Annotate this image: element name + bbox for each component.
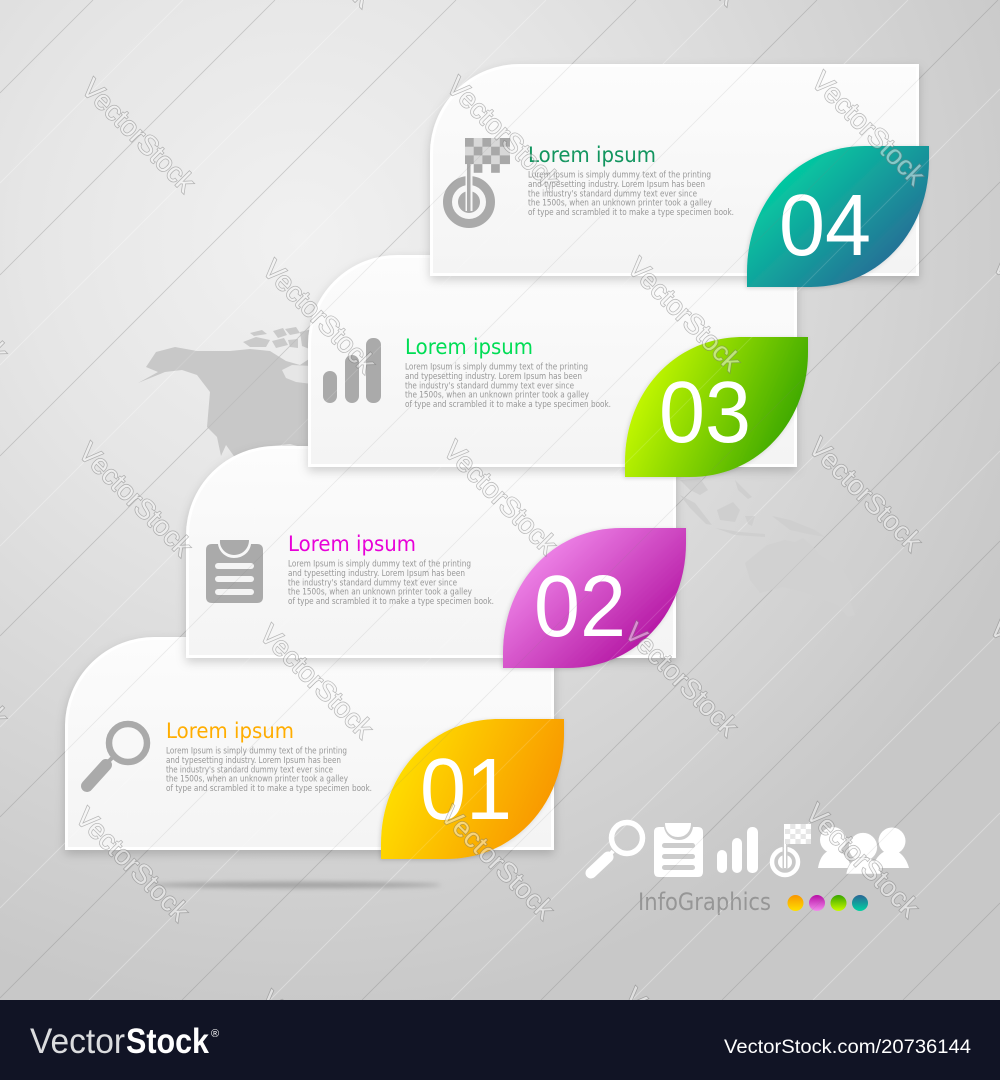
watermarks: VectorStock <box>435 799 561 925</box>
footer logo: ® <box>211 1028 219 1040</box>
text block 01: the industry's standard dummy text ever since <box>166 766 333 776</box>
watermarks: VectorStock <box>257 253 383 379</box>
text block 03: of type and scrambled it to make a type specimen book. <box>405 400 611 410</box>
text block 02: the 1500s, when an unknown printer took a galley <box>288 588 472 598</box>
text block 01: the 1500s, when an unknown printer took a galley <box>166 774 348 784</box>
footer bar <box>0 1000 1000 1080</box>
icon: checkered flag and target <box>448 138 510 224</box>
InfoGraphics label: InfoGraphics <box>638 888 771 916</box>
map: Hudson Bay <box>282 365 312 384</box>
icon: white magnifier <box>591 822 642 873</box>
panel: step 03 <box>310 256 808 477</box>
text block 04: and typesetting industry. Lorem Ipsum has been <box>528 180 705 190</box>
card 02 <box>188 448 674 656</box>
heading 03: Lorem ipsum <box>405 335 533 360</box>
leaf badge 03: 03 <box>659 364 751 461</box>
text block 01 <box>166 746 372 794</box>
panel: step 01 <box>66 638 564 859</box>
heading 01: Lorem ipsum <box>166 719 294 744</box>
watermarks: VectorStock <box>622 251 748 377</box>
text block 01: Lorem Ipsum is simply dummy text of the printing <box>166 746 347 756</box>
text block 04 <box>528 170 734 218</box>
watermarks: VectorStock <box>73 436 199 562</box>
card 04 <box>432 66 918 274</box>
map: Southeast Asia <box>680 478 825 537</box>
watermarks: VectorStock <box>800 797 926 923</box>
leaf badge 03 <box>625 337 808 477</box>
watermarks: VectorStock <box>803 431 929 557</box>
text block 02: Lorem Ipsum is simply dummy text of the printing <box>288 560 471 570</box>
panel: step 02 <box>188 448 686 668</box>
heading 02: Lorem ipsum <box>288 532 416 557</box>
text block 02: and typesetting industry. Lorem Ipsum has been <box>288 569 465 579</box>
footer logo: Stock <box>126 1022 209 1061</box>
watermarks: VectorStock <box>806 65 932 191</box>
watermarks: VectorStock <box>441 70 567 196</box>
watermarks: VectorStock <box>70 801 196 927</box>
text block 02: the industry's standard dummy text ever since <box>288 578 457 588</box>
icon: clipboard <box>206 540 263 603</box>
text block 01: of type and scrambled it to make a type specimen book. <box>166 784 372 794</box>
map: Arctic islands <box>243 327 312 350</box>
card 03 <box>310 256 796 466</box>
watermarks: VectorStock <box>254 618 380 744</box>
leaf badge 04: 04 <box>779 177 871 274</box>
icon: bar chart <box>323 338 381 403</box>
world map <box>138 327 855 617</box>
leaf badge 04 <box>747 146 929 287</box>
heading 04: Lorem ipsum <box>528 143 656 168</box>
text block 03: Lorem Ipsum is simply dummy text of the printing <box>405 362 588 372</box>
icon: magnifier <box>87 724 147 786</box>
text block 04: the 1500s, when an unknown printer took a galley <box>528 198 712 208</box>
text block 03: the industry's standard dummy text ever since <box>405 382 574 392</box>
icon: white clipboard <box>654 823 703 877</box>
text block 03 <box>405 362 611 410</box>
leaf badge 01: 01 <box>420 741 512 838</box>
text block 03: the 1500s, when an unknown printer took a galley <box>405 390 589 400</box>
watermarks: VectorStock <box>619 616 745 742</box>
text block 04: Lorem Ipsum is simply dummy text of the printing <box>528 170 711 180</box>
card 01 <box>66 638 552 848</box>
map: North America <box>138 347 312 459</box>
text block 02: of type and scrambled it to make a type specimen book. <box>288 597 494 607</box>
footer logo: Vector <box>30 1022 125 1061</box>
watermarks: VectorStock <box>76 72 202 198</box>
footer logo <box>30 1022 219 1061</box>
text block 03: and typesetting industry. Lorem Ipsum has been <box>405 372 582 382</box>
icon: white people <box>818 827 909 874</box>
icon: white bars <box>717 827 758 873</box>
panel: step 04 <box>432 66 929 287</box>
icon row <box>591 822 909 916</box>
footer image id: VectorStock.com/20736144 <box>724 1036 971 1058</box>
text block 04: the industry's standard dummy text ever since <box>528 190 697 200</box>
text block 04: of type and scrambled it to make a type specimen book. <box>528 208 734 218</box>
text block 02 <box>288 560 494 607</box>
floor shadow <box>151 882 441 888</box>
icon: white flag and target <box>772 824 811 875</box>
map: Australia <box>745 538 855 617</box>
colour dots <box>788 895 868 911</box>
watermarks: VectorStock <box>438 434 564 560</box>
leaf badge 02 <box>503 528 686 668</box>
leaf badge 02: 02 <box>534 558 626 655</box>
text block 01: and typesetting industry. Lorem Ipsum has been <box>166 756 341 766</box>
leaf badge 01 <box>381 719 564 859</box>
